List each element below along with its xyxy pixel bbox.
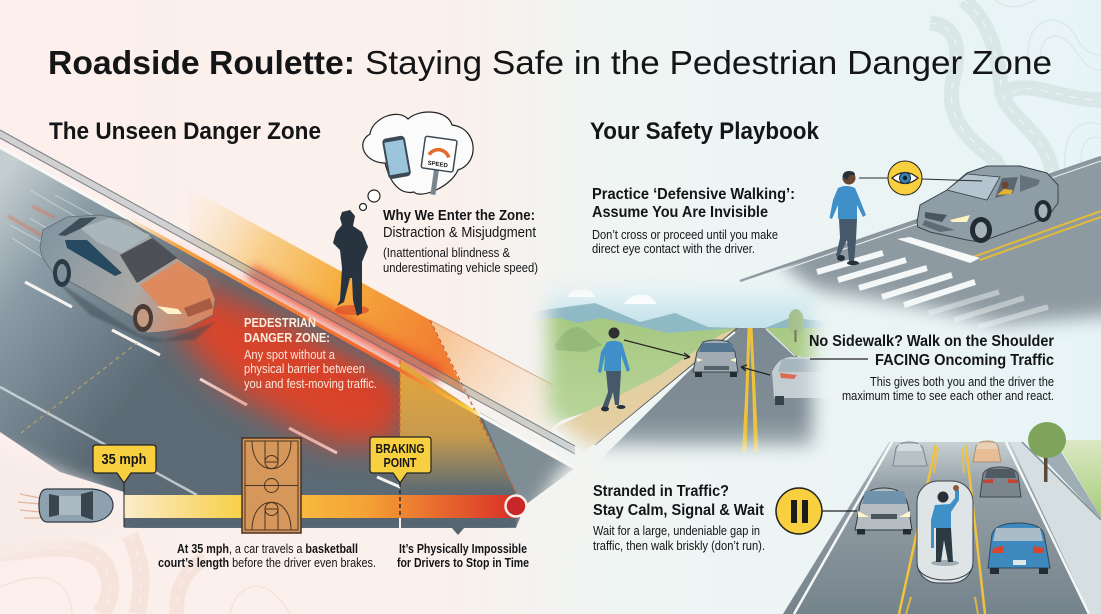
tip 2 text: No Sidewalk? Walk on the Shoulder — [809, 333, 1054, 350]
road with crosswalk — [736, 157, 1101, 340]
tree — [788, 309, 804, 342]
callout: 35 mph: 35 mph — [102, 452, 146, 468]
multi-lane road — [783, 442, 1090, 614]
marker: red end dot — [506, 496, 526, 516]
text: why we enter the zone: Why We Enter the Zone: — [383, 207, 535, 224]
text: pedestrian danger zone: DANGER ZONE: — [244, 330, 330, 345]
clouds — [567, 289, 657, 304]
pedestrian silhouette — [333, 210, 369, 316]
caption: impossible to stop: It’s Physically Impossible — [399, 541, 527, 556]
grass — [536, 318, 825, 429]
callout: braking point — [370, 437, 431, 483]
tree — [1028, 422, 1066, 482]
callout: braking point: POINT — [384, 455, 417, 470]
text: why we enter the zone: (Inattentional blindness & — [383, 246, 511, 260]
road illustration — [0, 147, 575, 560]
title: Staying Safe in the Pedestrian Danger Zone — [365, 44, 1052, 81]
tip 2 text: FACING Oncoming Traffic — [875, 352, 1054, 369]
danger zone glow on road — [170, 268, 400, 445]
tip 1 text — [592, 186, 795, 256]
icon: phone — [382, 135, 411, 180]
tip 2 text — [809, 333, 1054, 403]
tip 1 text: Practice ‘Defensive Walking’: — [592, 186, 795, 203]
text: why we enter the zone: underestimating vehicle speed) — [383, 261, 538, 275]
person signalling — [931, 485, 959, 562]
title — [48, 44, 1052, 81]
title: Roadside Roulette: — [48, 44, 355, 81]
decorative winding roads bottom left — [0, 535, 290, 614]
caption: basketball court length: At 35 mph, a car travels a basketball — [177, 541, 358, 556]
thought bubble — [360, 112, 473, 210]
icon: eye — [888, 161, 922, 195]
caption: impossible to stop: for Drivers to Stop in Time — [397, 555, 529, 570]
panel: your safety playbook — [500, 118, 1101, 614]
tip 1 text: Don’t cross or proceed until you make — [592, 228, 778, 242]
tip 3 text: Stranded in Traffic? — [593, 483, 729, 500]
text: pedestrian danger zone: physical barrier between — [244, 362, 365, 376]
tip 3 text: traffic, then walk briskly (don’t run). — [593, 539, 765, 553]
tan path — [555, 328, 737, 452]
sidewalk danger zone — [189, 188, 465, 393]
heading: your safety playbook: Your Safety Playbook — [590, 118, 820, 145]
caption: basketball court length: court’s length before the driver even brakes. — [158, 555, 376, 570]
background cars — [893, 442, 927, 466]
connector line — [822, 510, 857, 512]
icon: top-view car — [18, 489, 113, 522]
text: pedestrian danger zone: you and fest-moving traffic. — [244, 377, 377, 391]
walking person — [598, 328, 630, 412]
fade of road at right edge — [505, 440, 600, 545]
panel: the unseen danger zone — [0, 112, 600, 570]
text: pedestrian danger zone: PEDESTRIAN — [244, 315, 316, 330]
speeding car — [8, 190, 215, 342]
tip 2 text: This gives both you and the driver the — [870, 375, 1054, 389]
icon: pause — [776, 488, 822, 534]
text: pedestrian danger zone: Any spot without a — [244, 348, 335, 362]
median island — [917, 481, 973, 583]
sky — [541, 278, 818, 328]
tip 2 scene: shoulder walking — [536, 278, 825, 457]
tip 3 text: Wait for a large, undeniable gap in — [593, 524, 760, 538]
middle road — [604, 328, 824, 457]
oncoming car — [693, 340, 738, 377]
text: pedestrian danger zone — [244, 315, 377, 391]
tip 3 text: Stay Calm, Signal & Wait — [593, 502, 765, 519]
callout: braking point: BRAKING — [376, 441, 424, 456]
stranded car front — [855, 488, 912, 534]
caption: impossible to stop — [397, 541, 529, 570]
tip 1 scene: crosswalk — [736, 157, 1101, 340]
callout line: no sidewalk — [810, 358, 868, 360]
timeline — [18, 437, 526, 535]
arrows: facing traffic — [624, 340, 770, 375]
icon: basketball court — [242, 438, 301, 533]
curb and lane line — [0, 130, 575, 468]
text: why we enter the zone — [383, 207, 538, 275]
walking person — [830, 171, 866, 265]
rear car — [772, 357, 822, 405]
decorative winding roads top right — [930, 0, 1101, 172]
tip 1 text: Assume You Are Invisible — [592, 204, 768, 221]
icon: speed sign: SPEED — [427, 161, 449, 170]
callout: 35 mph — [93, 445, 156, 483]
tip 1 text: direct eye contact with the driver. — [592, 242, 755, 256]
braking zone panes — [400, 320, 553, 493]
tip 3 text — [593, 483, 765, 553]
tip 3 scene: stranded in traffic — [776, 422, 1101, 614]
arrows: eye contact line — [859, 178, 982, 181]
text: why we enter the zone: Distraction & Misjudgment — [383, 224, 537, 241]
hills — [538, 303, 822, 333]
heading: unseen danger zone: The Unseen Danger Zone — [49, 118, 321, 145]
gray sedan with driver — [917, 166, 1058, 243]
grass and sidewalk — [1055, 440, 1101, 517]
caption: basketball court length — [158, 541, 376, 570]
tip 2 text: maximum time to see each other and react. — [842, 389, 1054, 403]
